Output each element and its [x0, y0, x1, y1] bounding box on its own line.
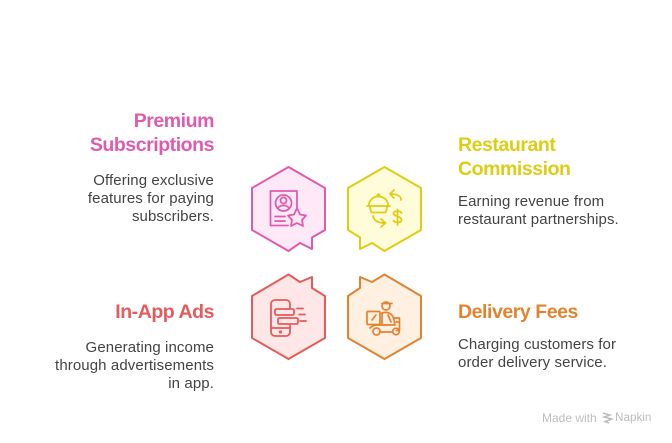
hexagon: in-app ads [252, 274, 325, 359]
icon: profile document with star [270, 191, 306, 226]
icon: delivery rider on scooter [367, 302, 400, 335]
hexagon: restaurant commission [348, 167, 421, 251]
heading: Premium Subscriptions: Premium [134, 110, 214, 132]
hexagon: premium subscriptions [252, 167, 325, 251]
text: Restaurant Commission description: Earning revenue from [458, 193, 604, 210]
text: Premium Subscriptions description: features for paying [88, 190, 214, 206]
text: Delivery Fees description: Charging customers for [458, 336, 616, 352]
text: In-App Ads description: through advertisements [55, 356, 214, 374]
icon: cloche with exchange arrows and dollar [367, 190, 402, 227]
text: In-App Ads description: in app. [168, 374, 214, 392]
heading: Premium Subscriptions [90, 110, 214, 156]
watermark: Made with Napkin: Napkin [615, 411, 651, 424]
text: Premium Subscriptions description: subscribers. [132, 208, 214, 224]
icon: phone with ad banners [271, 300, 306, 336]
text: Delivery Fees description: order delivery service. [458, 354, 607, 370]
text: Premium Subscriptions description: Offering exclusive [93, 172, 214, 188]
heading: Restaurant Commission: Commission [458, 158, 571, 180]
text: Premium Subscriptions description [88, 172, 214, 224]
heading: Restaurant Commission: Restaurant [458, 134, 555, 156]
text: In-App Ads description: Generating income [86, 338, 214, 356]
heading: Restaurant Commission [458, 134, 571, 180]
text: Delivery Fees description [458, 336, 616, 370]
heading: Delivery Fees: Delivery Fees [458, 301, 578, 323]
icon: Napkin logo [602, 412, 613, 424]
heading: Premium Subscriptions: Subscriptions [90, 134, 214, 156]
text: Restaurant Commission description [458, 193, 619, 228]
text: Restaurant Commission description: restaurant partnerships. [458, 211, 619, 228]
hexagon: delivery fees [348, 274, 421, 359]
watermark: Made with Napkin: Made with [542, 411, 597, 425]
watermark: Made with Napkin [542, 411, 651, 425]
heading: In-App Ads: In-App Ads [115, 301, 214, 323]
text: In-App Ads description [55, 338, 214, 392]
